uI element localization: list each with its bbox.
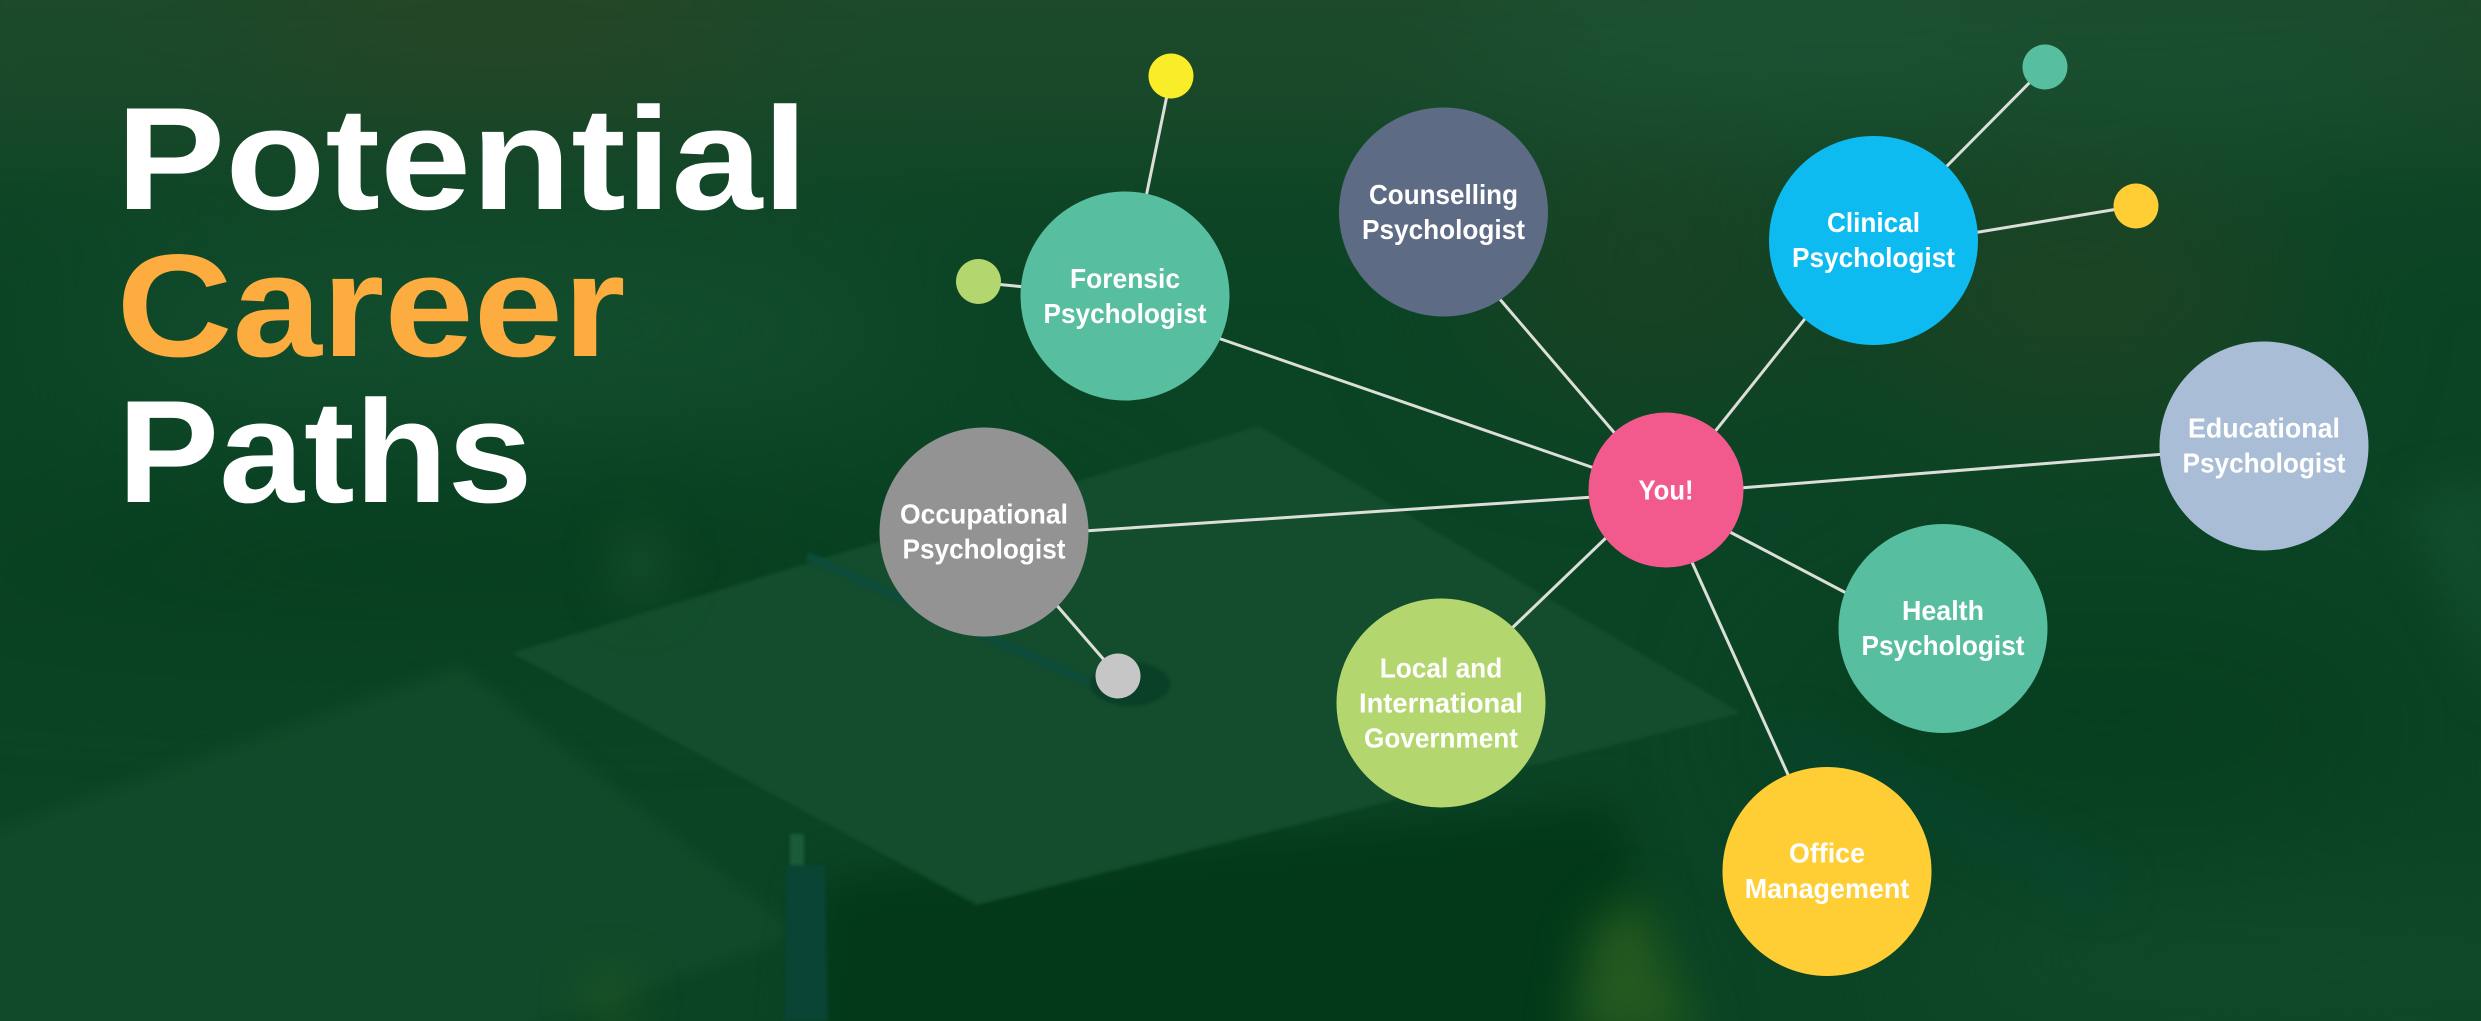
node: Office Management xyxy=(1722,767,1932,976)
dot: amber xyxy=(2114,184,2158,228)
underside of graduation cap xyxy=(800,800,1680,1021)
connector: Office to You xyxy=(1691,560,1790,779)
node: Occupational Psychologist: Psychologist xyxy=(902,534,1066,564)
node: Health Psychologist: Health xyxy=(1902,595,1984,626)
title: Career xyxy=(116,224,626,387)
node: Local and International Government xyxy=(1336,598,1546,808)
node: You!: You! xyxy=(1638,474,1694,506)
connector: Forensic to yellow dot xyxy=(1146,76,1171,197)
node: You! xyxy=(1588,412,1744,568)
node: Clinical Psychologist: Clinical xyxy=(1827,207,1920,238)
node: Clinical Psychologist: Psychologist xyxy=(1792,242,1955,273)
connector: Occupational to You xyxy=(1084,497,1594,531)
node: Forensic Psychologist: Psychologist xyxy=(1044,298,1206,329)
dot: green xyxy=(956,259,1001,304)
node: Local and International Government: International xyxy=(1359,688,1523,718)
dot: grey xyxy=(1096,654,1140,698)
node: Health Psychologist: Psychologist xyxy=(1862,630,2024,661)
node: Counselling Psychologist: Psychologist xyxy=(1362,214,1525,245)
connector: Clinical to You xyxy=(1713,315,1808,434)
connector: Health to You xyxy=(1728,531,1850,595)
blurred highlights xyxy=(585,480,2481,1021)
connector: Forensic to green dot xyxy=(985,283,1025,287)
connector: Counselling to You xyxy=(1498,297,1618,437)
connector: Clinical to yellow dot xyxy=(1973,206,2136,233)
graduation cap board xyxy=(512,426,1741,905)
title xyxy=(116,77,808,533)
cap string xyxy=(807,556,1097,685)
node: Clinical Psychologist xyxy=(1769,136,1978,345)
dot: yellow xyxy=(1148,54,1194,98)
node: Forensic Psychologist xyxy=(1020,192,1230,400)
title: Paths xyxy=(118,370,532,533)
node: Educational Psychologist: Educational xyxy=(2188,412,2340,444)
node: Occupational Psychologist xyxy=(880,428,1088,636)
node: Counselling Psychologist xyxy=(1339,108,1548,316)
tassel xyxy=(784,834,828,1021)
node: Educational Psychologist: Psychologist xyxy=(2182,448,2346,478)
node: Health Psychologist xyxy=(1838,524,2048,733)
node: Local and International Government: Local and xyxy=(1380,652,1502,684)
cap button xyxy=(1090,662,1170,706)
node: Forensic Psychologist: Forensic xyxy=(1070,263,1180,294)
node: Counselling Psychologist: Counselling xyxy=(1369,179,1518,210)
node: Office Management: Office xyxy=(1789,838,1865,868)
connector: Educational to You xyxy=(1740,454,2165,488)
connector: Forensic to You xyxy=(1215,337,1597,469)
node: Occupational Psychologist: Occupational xyxy=(900,498,1068,530)
title: Potential xyxy=(116,77,808,240)
connector: Clinical to teal dot xyxy=(1943,67,2045,170)
node: Office Management: Management xyxy=(1745,873,1909,904)
connector: Government to You xyxy=(1510,535,1609,630)
node: Educational Psychologist xyxy=(2160,342,2368,550)
connector: Occupational to grey dot xyxy=(1053,601,1118,676)
node: Local and International Government: Government xyxy=(1364,722,1518,754)
dot: teal xyxy=(2022,44,2068,90)
background cap, lower left xyxy=(0,665,800,1021)
